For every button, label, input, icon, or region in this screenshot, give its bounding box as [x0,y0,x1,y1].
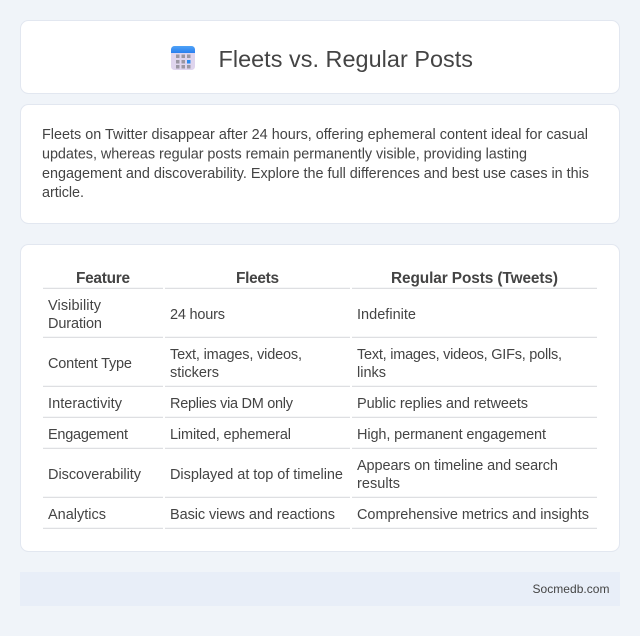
row: interactivity [48,396,528,412]
row: engagement: High, permanent engagement [357,427,546,443]
text block: introduction paragraph: engagement and discoverability. Explore the full differences and best use cases in this [42,166,589,182]
text block: introduction paragraph: article. [42,185,84,201]
table header: Fleets [236,270,279,287]
text block: introduction paragraph [42,127,589,201]
title: Fleets vs. Regular Posts [218,46,473,72]
row: analytics: Comprehensive metrics and insights [357,507,589,523]
row: discoverability: results [357,476,400,492]
row: content type: Text, images, videos, [170,347,302,363]
panel: comparison table [20,244,620,552]
table header: Regular Posts (Tweets) [391,270,558,287]
text block: introduction paragraph: updates, whereas regular posts remain permanently visible, providing lasting [42,146,527,162]
row: content type: links [357,365,386,381]
row: discoverability [48,458,558,492]
text block: introduction paragraph: Fleets on Twitter disappear after 24 hours, offering ephemeral content ideal for casual [42,127,588,143]
row: visibility duration: Indefinite [357,307,416,323]
row: engagement: Engagement [48,427,128,443]
footer credit: Socmedb.com [532,582,610,596]
row: visibility duration: Visibility [48,298,102,314]
row: engagement [48,427,546,443]
row: analytics [48,507,589,523]
row: interactivity: Replies via DM only [170,396,294,412]
row: visibility duration: 24 hours [170,307,225,323]
row: analytics: Analytics [48,507,106,523]
table header: Feature [76,270,130,287]
row: content type: Text, images, videos, GIFs, polls, [357,347,562,363]
row: content type [48,347,562,381]
row: discoverability: Displayed at top of timeline [170,467,343,483]
row: engagement: Limited, ephemeral [170,427,291,443]
panel: introduction [20,104,620,224]
row: visibility duration: Duration [48,316,102,332]
row: interactivity: Public replies and retweets [357,396,528,412]
icon: calendar [171,46,195,70]
row: discoverability: Discoverability [48,467,142,483]
row: analytics: Basic views and reactions [170,507,335,523]
row: visibility duration [48,298,416,332]
row: content type: Content Type [48,356,132,372]
panel: title card [20,20,620,94]
row: discoverability: Appears on timeline and search [357,458,558,474]
table header [76,270,558,287]
row: content type: stickers [170,365,219,381]
footer [20,572,620,606]
row: interactivity: Interactivity [48,396,123,412]
